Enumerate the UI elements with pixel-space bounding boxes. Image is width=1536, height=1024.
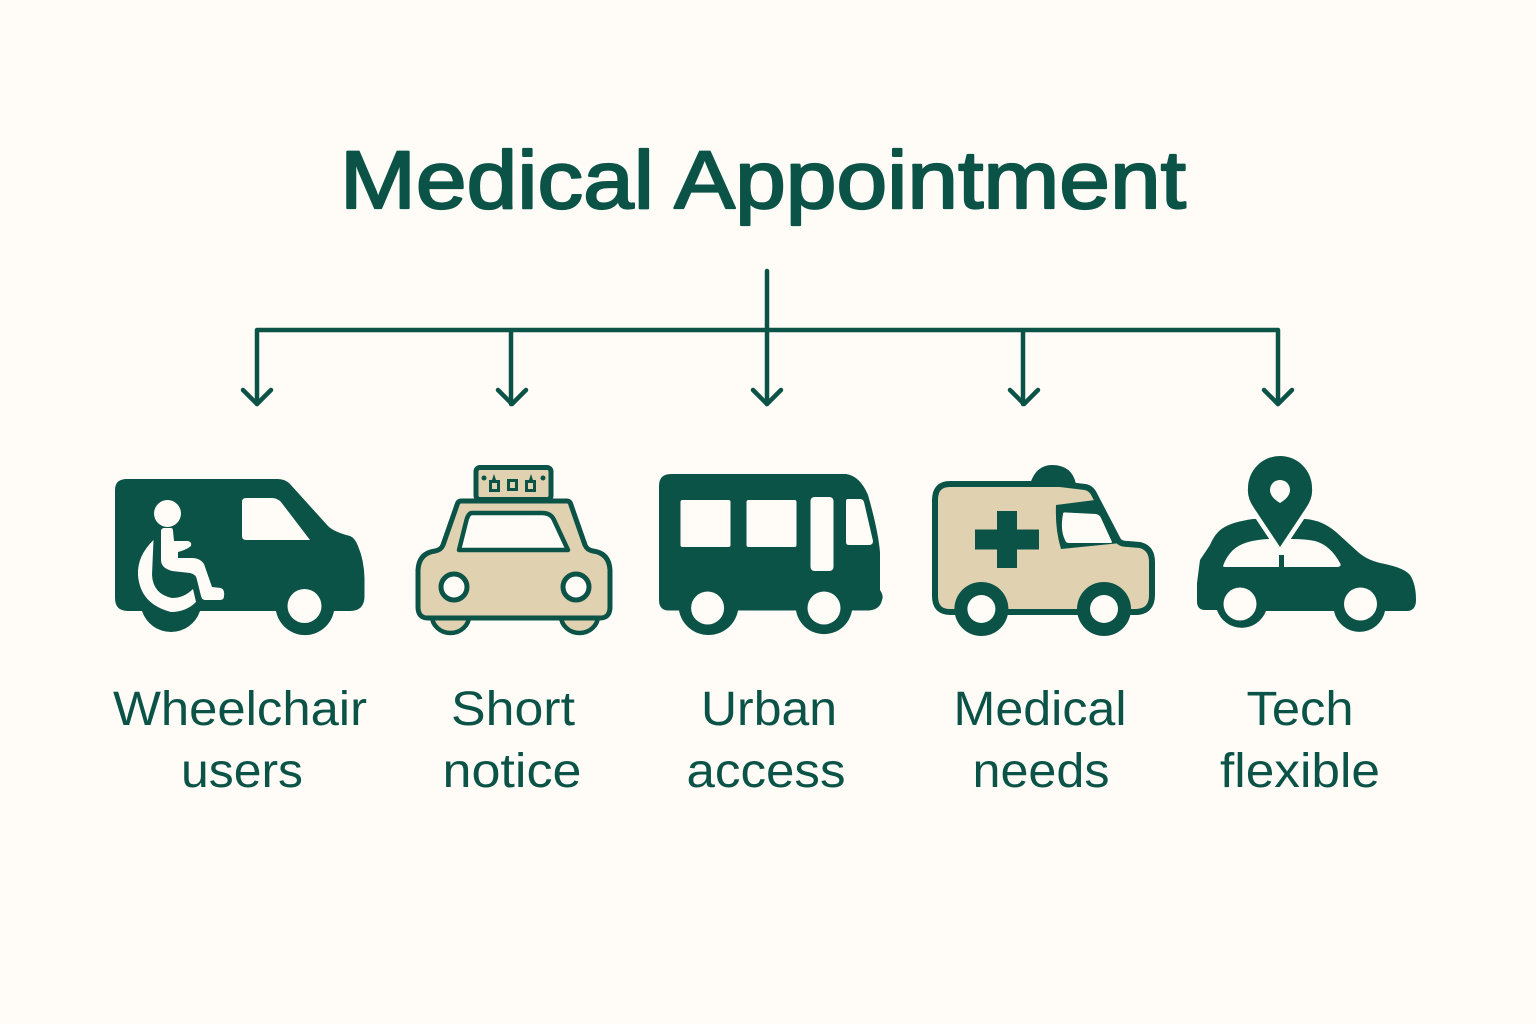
icon: bus (659, 474, 883, 635)
arrows: tree connector (243, 271, 1292, 404)
label: wheelchair users: Wheelchair (113, 683, 367, 736)
label: wheelchair users: users (181, 745, 303, 798)
label: medical needs: needs (972, 745, 1110, 798)
icon: ambulance (935, 465, 1152, 636)
icon: wheelchair van (115, 479, 364, 635)
label: medical needs: Medical (954, 683, 1126, 736)
label: urban access: access (686, 745, 846, 798)
title: Medical Appointment (340, 135, 1186, 226)
label: urban access: Urban (701, 683, 837, 736)
icon: car with location pin (1197, 456, 1416, 632)
label: short notice: Short (451, 683, 575, 736)
label: tech flexible: Tech (1246, 683, 1354, 736)
icon: taxi (418, 468, 610, 633)
label: short notice: notice (442, 745, 582, 798)
label: tech flexible: flexible (1220, 745, 1380, 798)
